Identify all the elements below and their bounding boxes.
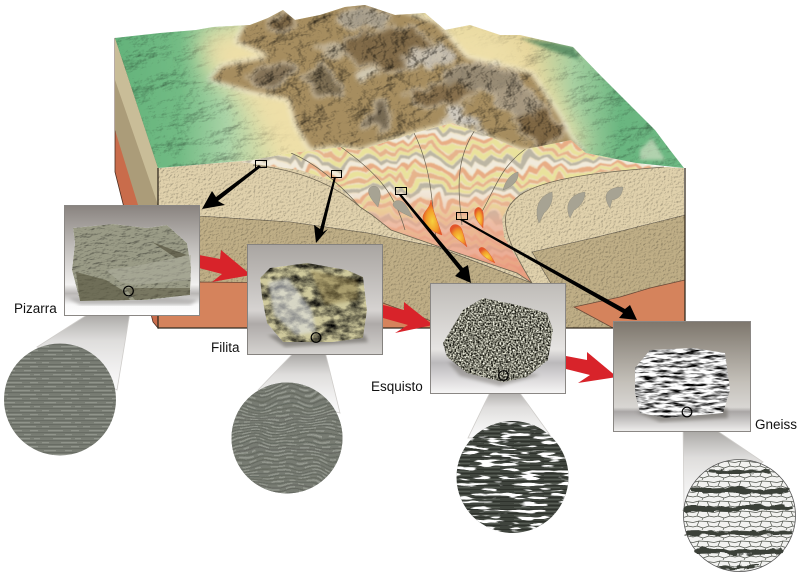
geological block diagram — [110, 0, 720, 328]
magnified texture: Filita — [232, 382, 342, 494]
fault lines — [291, 130, 530, 240]
orange base right — [574, 280, 685, 328]
terrain surface — [110, 0, 690, 175]
green right ridge shadow — [520, 38, 580, 60]
magnification cones — [37, 300, 763, 507]
label: Filita — [211, 340, 240, 355]
sample: Esquisto — [371, 284, 566, 394]
sample: Pizarra — [14, 206, 200, 316]
front cross section — [158, 147, 685, 328]
red arrow Esquisto to Gneiss — [566, 352, 617, 383]
black arrows from the cross-section to samples — [202, 165, 637, 320]
rock — [635, 348, 730, 418]
mountain ridges — [248, 7, 564, 146]
magnifier ring — [682, 407, 692, 417]
sample: Filita — [211, 244, 382, 355]
magma drops — [423, 200, 495, 263]
magnifier ring — [499, 371, 508, 380]
magnified texture: Esquisto — [456, 421, 568, 533]
sample location boxes — [256, 160, 468, 220]
magnified texture: Pizarra — [4, 344, 116, 456]
fold boundary lines — [253, 165, 664, 283]
block left side — [115, 38, 158, 328]
red arrows: metamorphic progression — [199, 250, 617, 383]
magnifier ring — [124, 286, 133, 296]
label: Pizarra — [14, 301, 57, 316]
magnified texture: Gneiss — [684, 460, 796, 572]
pink melt zone — [353, 196, 530, 282]
magnifier ring — [311, 333, 321, 342]
rock — [72, 224, 191, 301]
label: Gneiss — [755, 417, 797, 432]
arrow to Esquisto — [399, 194, 471, 283]
arrow to Gneiss — [460, 219, 637, 320]
orange base left — [158, 282, 450, 328]
dark bands — [686, 471, 791, 568]
lower tan layer — [158, 212, 685, 328]
rock — [260, 263, 367, 342]
cream foothills — [200, 20, 590, 165]
block outline — [158, 168, 685, 328]
rock — [443, 298, 553, 382]
arrow to Pizarra — [202, 165, 261, 209]
label: Esquisto — [371, 379, 423, 394]
folded metamorphic stripes — [240, 123, 661, 282]
sample: Gneiss — [614, 322, 797, 432]
red arrow Pizarra to Filita — [199, 250, 251, 282]
red arrow Filita to Esquisto — [383, 302, 433, 333]
brown mountains — [208, 0, 586, 153]
arrow to Filita — [314, 177, 336, 243]
grey teardrops — [369, 172, 623, 223]
